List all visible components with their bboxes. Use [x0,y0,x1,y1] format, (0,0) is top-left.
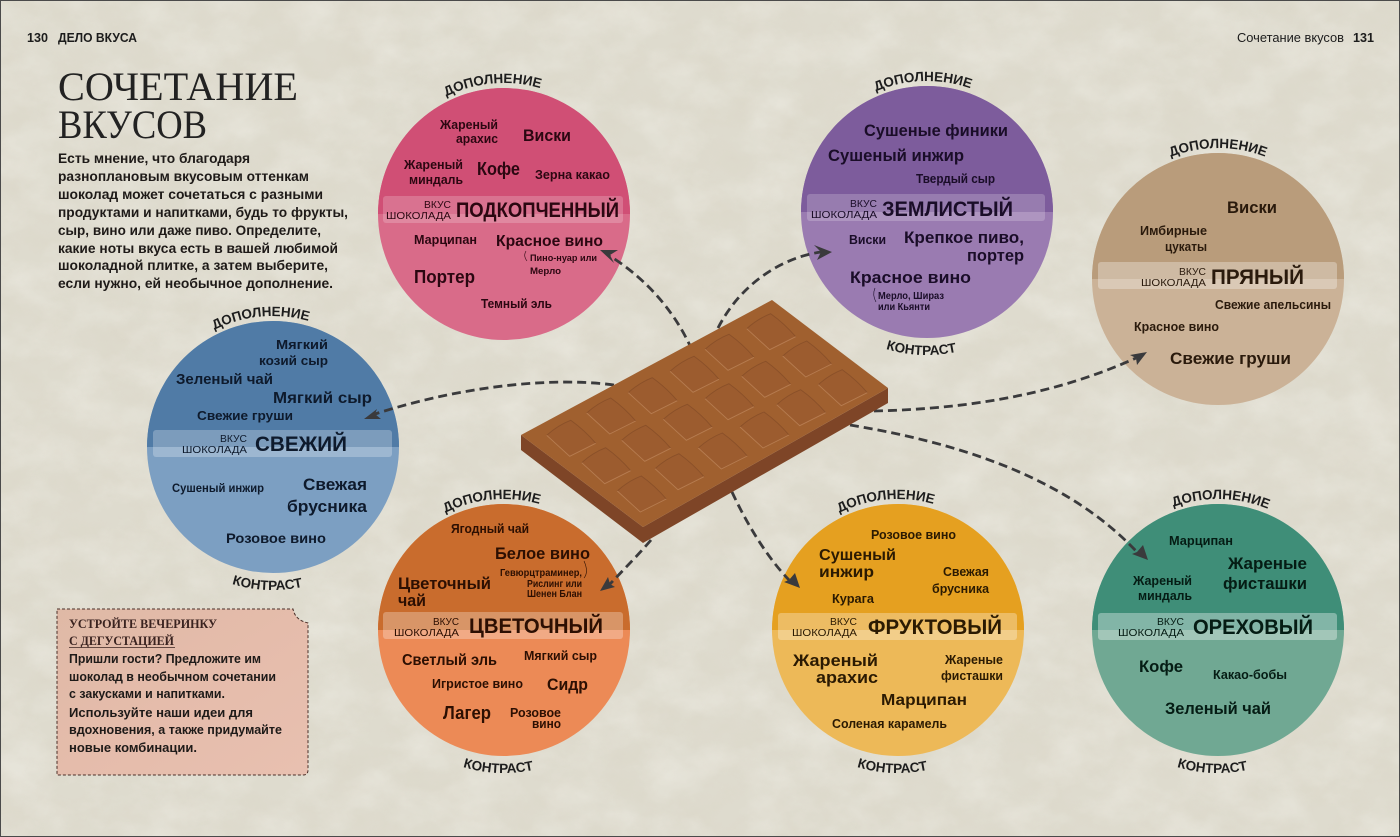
circle: fresh: козий сыр [259,353,328,368]
circle: fresh: Свежие груши [197,408,293,423]
circle: nutty: ДОПОЛНЕНИЕ [1173,490,1270,510]
page header left [27,30,138,45]
callout: tasting party [57,609,308,775]
circle: fruity: Курага [832,591,875,606]
intro text: какие ноты вкуса есть в вашей любимой [58,240,338,256]
circle: nutty: Какао-бобы [1213,667,1287,682]
circle: fruity: Розовое вино [871,527,956,542]
circle: earthy: Твердый сыр [916,171,995,186]
callout: tasting party: Используйте наши идеи для [69,705,253,720]
circle: nutty: ВКУС [1157,616,1184,628]
circle: floral: ЦВЕТОЧНЫЙ [469,614,603,638]
circle: earthy: ШОКОЛАДА [811,209,877,221]
intro text: если нужно, ей необычное дополнение. [58,275,333,291]
circle: fresh: ШОКОЛАДА [182,444,247,456]
circle: fruity: арахис [816,668,878,687]
circle: smoky: Зерна какао [535,167,610,182]
circle: earthy: Красное вино [850,268,971,287]
circle: nutty [1092,490,1344,773]
circle: fresh: Мягкий сыр [273,390,372,407]
circle: floral: Розовое [510,706,561,720]
circle: smoky [378,74,630,340]
circle: fresh: Свежая [303,475,367,494]
circle: smoky: ПОДКОПЧЕННЫЙ [456,198,619,222]
callout: tasting party: С ДЕГУСТАЦИЕЙ [69,634,174,648]
circle: earthy [801,72,1053,355]
intro text: продуктами и напитками, будь то фрукты, [58,204,348,220]
circle: earthy: или Кьянти [878,302,930,313]
circle: spicy: Свежие апельсины [1215,297,1331,312]
circle: earthy: ВКУС [850,198,877,210]
circle: earthy: КОНТРАСТ [886,340,956,355]
circle: fruity: брусника [932,581,990,596]
circle: fruity: Соленая карамель [832,716,947,731]
circle: spicy: ШОКОЛАДА [1141,277,1206,289]
circle: floral: Шенен Блан [527,589,582,600]
circle: smoky: Жареный [439,117,498,132]
circle: fruity: фисташки [941,668,1003,683]
circle: fruity: Жареные [944,652,1003,667]
chocolate bar [521,300,888,543]
circle: spicy: Имбирные [1140,223,1207,238]
intro text: разноплановым вкусовым оттенкам [58,168,309,184]
circle: smoky: Пино-нуар или [530,253,597,264]
callout: tasting party: УСТРОЙТЕ ВЕЧЕРИНКУ [69,617,217,631]
title: СОЧЕТАНИЕ [58,64,298,109]
circle: nutty: ОРЕХОВЫЙ [1193,615,1313,639]
circle: smoky: Кофе [477,159,520,179]
circle: floral: вино [532,717,561,731]
page header right: Сочетание вкусов [1237,30,1344,45]
circle: earthy: ЗЕМЛИСТЫЙ [882,197,1013,221]
circle: fresh: Сушеный инжир [172,481,264,495]
circle: smoky: ШОКОЛАДА [386,210,451,222]
circle: nutty: ШОКОЛАДА [1118,627,1184,639]
circle: earthy: Крепкое пиво, [904,228,1024,247]
circle: nutty: миндаль [1138,588,1192,603]
circle: fresh: КОНТРАСТ [232,575,302,590]
page header left: 130 [27,30,48,45]
circle: smoky: ВКУС [424,199,451,211]
circle: smoky: Темный эль [481,296,552,311]
circle: nutty: Жареные [1227,554,1307,573]
callout: tasting party: новые комбинации. [69,740,197,755]
circle: floral: Сидр [547,675,588,694]
intro text: шоколад может сочетаться с разными [58,186,323,202]
intro text [58,150,348,291]
circle: floral: Лагер [443,703,491,723]
circle: fruity: Свежая [943,564,989,579]
circle: smoky: Портер [414,267,475,287]
circle: floral: Ягодный чай [451,521,529,536]
circle: floral: Светлый эль [402,652,497,669]
circle: smoky: арахис [456,131,498,146]
circle: fresh [147,306,399,590]
circle: nutty: Жареный [1132,573,1192,588]
circle: fruity: инжир [819,564,874,581]
circle: smoky: миндаль [409,172,463,187]
circle: floral: Рислинг или [527,579,582,590]
circle: nutty: фисташки [1223,574,1307,593]
dashed arrows from the bar to the circles [364,245,1148,591]
circle: floral: Мягкий сыр [524,648,597,663]
circle: floral: КОНТРАСТ [464,758,532,773]
title: ВКУСОВ [58,102,207,147]
intro text: шоколадной плитке, а затем выберите, [58,257,328,273]
circle: nutty: Кофе [1139,657,1183,676]
circle: floral: Белое вино [495,544,590,563]
circle: fresh: ВКУС [220,433,247,445]
circle: smoky: Красное вино [496,233,603,250]
circle: smoky: ДОПОЛНЕНИЕ [445,74,542,99]
circle: nutty: КОНТРАСТ [1178,758,1246,773]
circle: fruity: ВКУС [830,616,857,628]
circle: earthy: ДОПОЛНЕНИЕ [875,72,972,94]
title [58,64,298,147]
circle: earthy: Сушеные финики [864,121,1008,140]
circle: fruity: Жареный [792,651,878,670]
circle: fresh: Зеленый чай [176,371,273,388]
circle: floral: чай [398,591,426,610]
page header left: ДЕЛО ВКУСА [58,30,138,45]
circle: earthy: Сушеный инжир [828,146,964,165]
circle: fresh: Розовое вино [226,530,326,546]
circle: spicy: ВКУС [1179,266,1206,278]
circle: smoky: Жареный [403,157,463,172]
circle: nutty: Марципан [1169,533,1233,548]
circle: spicy: Виски [1227,198,1277,217]
circle: spicy [1092,138,1344,405]
circle: spicy: Красное вино [1134,319,1219,334]
circle: earthy: Виски [849,232,886,247]
circle: floral: Гевюрцтраминер, [500,568,582,579]
circle: fruity [772,490,1024,773]
callout: tasting party: вдохновения, а также придумайте [69,722,282,737]
circle: nutty: Зеленый чай [1165,699,1271,718]
circle: fresh: брусника [287,497,368,516]
circle: fruity: ДОПОЛНЕНИЕ [838,490,935,516]
circle: floral: Цветочный [398,574,491,593]
circle: fresh: Мягкий [276,337,328,352]
circle: spicy: цукаты [1165,239,1207,254]
circle: smoky: Мерло [530,266,561,277]
circle: fresh: СВЕЖИЙ [255,432,347,456]
circle: fruity: КОНТРАСТ [858,758,926,773]
page header right: 131 [1353,30,1374,45]
circle: floral: ШОКОЛАДА [394,627,459,639]
intro text: Есть мнение, что благодаря [58,150,250,166]
circle: earthy: портер [967,246,1024,265]
circle: smoky: Виски [523,126,571,145]
circle: floral: Игристое вино [432,676,523,691]
circle: spicy: Свежие груши [1170,349,1291,368]
circle: fruity: ФРУКТОВЫЙ [868,615,1002,639]
circle: fruity: Марципан [881,692,967,709]
callout: tasting party: шоколад в необычном сочетании [69,669,276,684]
circle: earthy: Мерло, Шираз [878,291,944,302]
intro text: сыр, вино или даже пиво. Определите, [58,222,321,238]
callout: tasting party: с закусками и напитками. [69,686,225,701]
circle: floral: ВКУС [433,616,459,628]
circle: fresh: ДОПОЛНЕНИЕ [213,306,310,332]
circle: fruity: ШОКОЛАДА [792,627,857,639]
circle: floral: ДОПОЛНЕНИЕ [444,490,541,516]
circle: fruity: Сушеный [819,547,896,564]
circle: spicy: ПРЯНЫЙ [1211,265,1304,289]
circle: floral [378,490,630,773]
circle: spicy: ДОПОЛНЕНИЕ [1170,138,1268,160]
callout: tasting party: Пришли гости? Предложите им [69,651,261,666]
circle: smoky: Марципан [414,232,477,247]
